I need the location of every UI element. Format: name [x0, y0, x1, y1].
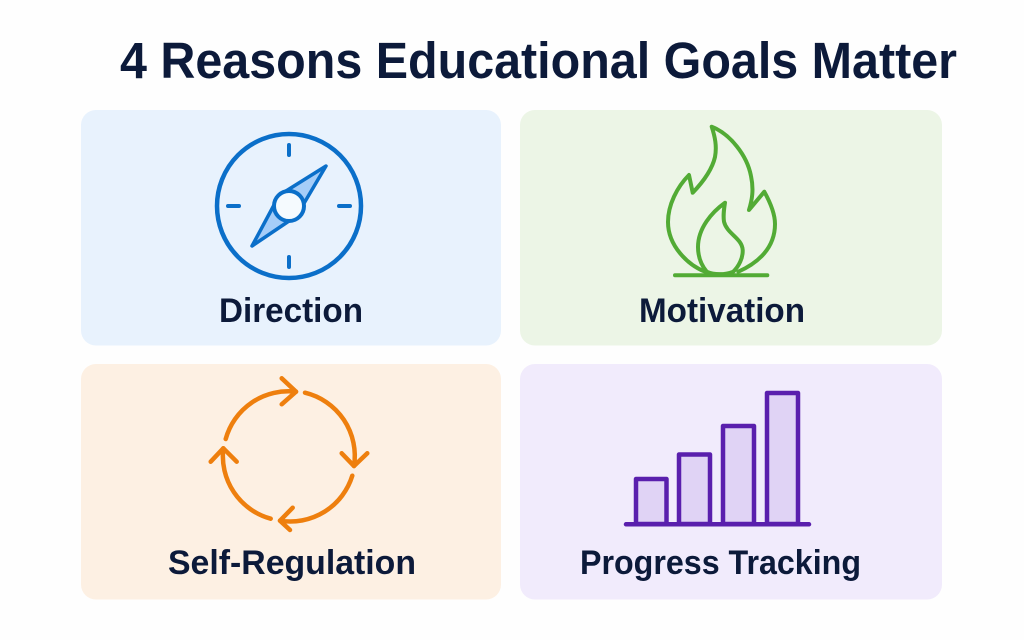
panel: motivation: [520, 110, 942, 346]
title: 4 Reasons Educational Goals Matter: [120, 32, 957, 89]
label: motivation: Motivation: [639, 292, 805, 330]
icon: flame: [668, 127, 775, 275]
icon: cycle arrows: [211, 378, 367, 530]
panel: progress tracking: [520, 364, 942, 600]
label: direction: Direction: [219, 292, 363, 330]
icon: bar chart: [626, 393, 809, 524]
icon: compass: [217, 134, 361, 278]
panel: direction: [81, 110, 501, 346]
label: progress tracking: Progress Tracking: [580, 544, 861, 582]
label: self-regulation: Self-Regulation: [168, 544, 416, 582]
panel: self-regulation: [81, 364, 501, 600]
